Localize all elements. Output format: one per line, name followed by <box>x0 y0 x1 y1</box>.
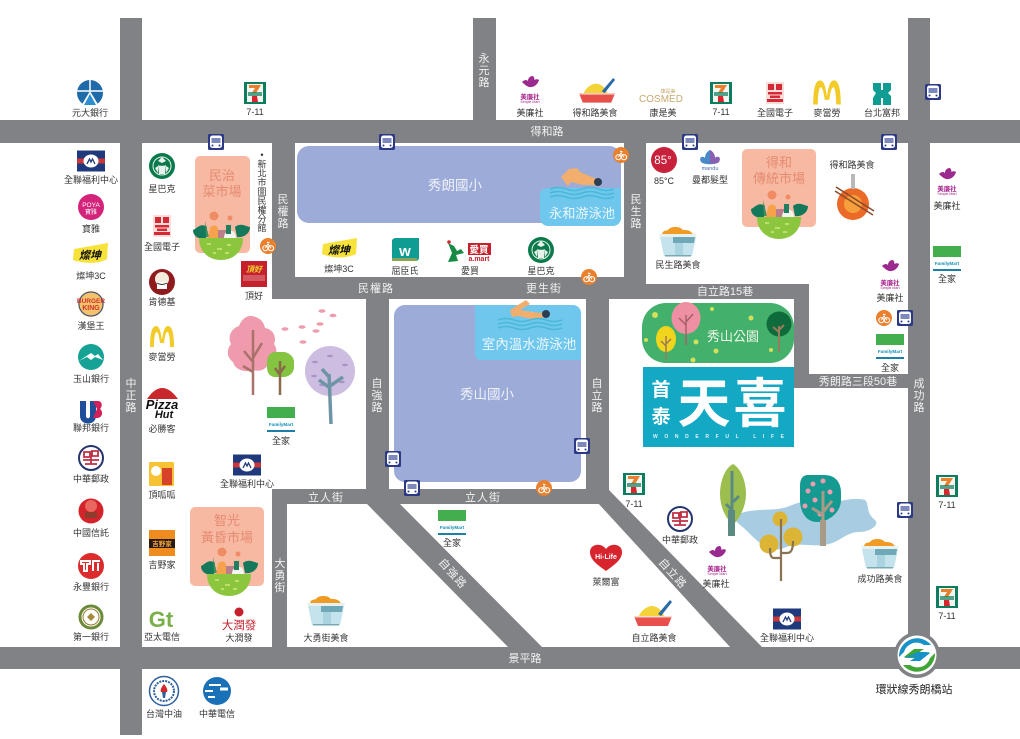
road name: 中正路: 中 <box>126 377 136 390</box>
store: 漢堡王 <box>77 291 105 331</box>
store: 全家 right: 全家 <box>938 273 956 284</box>
road name: 大勇街: 街 <box>274 580 286 594</box>
store: 7-11 right lower: 7-11 <box>938 611 956 621</box>
store: 中華郵政 left: 中華郵政 <box>73 473 109 484</box>
store: 全聯福利中心 left <box>64 150 118 185</box>
store: 康是美 <box>639 88 683 118</box>
road name: 自強路 diagonal: 自強路 <box>436 556 469 591</box>
panel: 秀山國小 <box>394 300 581 482</box>
illustration: pink, green and purple trees <box>228 309 355 424</box>
store: 美廉社 inner right: Simple Mart <box>880 286 900 290</box>
store: 得和路美食 right: 得和路美食 <box>829 159 875 170</box>
library label: 新北市圖民權分館: 新 <box>257 158 267 170</box>
road name: 永元路: 永 <box>478 51 490 65</box>
store: 美廉社 top: Simple Mart <box>520 100 540 104</box>
panel: 秀朗國小 <box>297 146 621 226</box>
store: 全家 bottom center: 全家 <box>443 537 461 548</box>
brand block: 首泰天喜: 喜 <box>734 375 786 434</box>
store: 燦坤3C center: 燦坤 <box>328 244 352 257</box>
store: 肯德基 <box>148 269 176 307</box>
store: 大勇街美食: 大勇街美食 <box>303 632 349 643</box>
store: 美廉社 right: 美廉社 <box>937 184 957 193</box>
store: 美廉社 top: 美廉社 <box>516 107 544 118</box>
store: 美廉社 right: 美廉社 <box>933 200 961 211</box>
library label: 新北市圖民權分館: 館 <box>257 222 267 233</box>
store: 美廉社 center <box>702 546 730 589</box>
store: 寶雅: 寶雅 <box>82 223 100 234</box>
store: 中華郵政 center: 中華郵政 <box>662 534 698 545</box>
store: 星巴克 center: 星巴克 <box>527 266 555 276</box>
store: 全家 inner right: FamilyMart <box>878 349 903 354</box>
library label: 新北市圖民權分館: 市 <box>257 177 267 188</box>
panel: 智光黃昏市場 <box>190 507 264 596</box>
panel: 秀山公園: 秀山公園 <box>707 329 759 344</box>
store: 美廉社 inner right <box>876 260 904 303</box>
store: 台灣中油: 台灣中油 <box>146 708 182 719</box>
store: 中華郵政 center <box>662 507 698 545</box>
road name: 立人街 left: 立人街 <box>308 490 344 504</box>
store: 全家 inner right: 全家 <box>881 362 899 373</box>
library label: 新北市圖民權分館: 圖 <box>257 187 267 197</box>
store: 永豐銀行: 永豐銀行 <box>73 581 109 592</box>
store: 聯邦銀行: 聯邦銀行 <box>73 422 109 433</box>
store: 中華電信: 中華電信 <box>199 708 235 719</box>
road name: 民生路: 路 <box>630 217 642 230</box>
road name: 自立路 diagonal: 自立路 <box>656 555 690 591</box>
store: 萊爾富: Hi-Life <box>595 554 617 561</box>
store: 麥當勞 top <box>813 80 841 118</box>
store: 7-11 center <box>623 473 645 509</box>
store: 7-11 top right <box>710 82 732 117</box>
store: 漢堡王: BURGER <box>77 298 105 305</box>
store: 漢堡王: 漢堡王 <box>77 320 105 331</box>
store: 星巴克 left: 星巴克 <box>148 184 176 194</box>
road name: 民權路 vertical: 權 <box>278 205 288 218</box>
road name: 自立路: 路 <box>592 401 602 414</box>
store: 玉山銀行: 玉山銀行 <box>73 373 109 384</box>
store: 元大銀行: 元大銀行 <box>72 107 108 118</box>
road name: 民權路 horizontal: 民權路 <box>358 282 394 295</box>
panel: 得和傳統市場: 得和 <box>766 155 792 170</box>
store: 自立路美食: 自立路美食 <box>631 632 677 643</box>
store: 美廉社 inner right: 美廉社 <box>876 292 904 303</box>
store: 亞太電信: Gt <box>149 607 174 632</box>
library label: 新北市圖民權分館: • <box>260 150 264 160</box>
road name: 景平路: 景平路 <box>508 652 542 665</box>
road name: 民生路: 生 <box>630 204 642 218</box>
store: 萊爾富 <box>590 545 622 587</box>
swimming pool: 室內溫水游泳池 <box>475 300 581 360</box>
road name: 成功路: 成 <box>914 377 924 390</box>
panel: 民治菜市場 <box>193 156 250 260</box>
brand block: 首泰天喜: WONDERFUL LIFE <box>653 434 785 440</box>
store: 得和路美食 right <box>829 159 875 220</box>
store: 中國信託: 中國信託 <box>73 527 109 538</box>
road name: 自立路15巷: 自立路15巷 <box>697 284 753 298</box>
store: 愛買: 愛買 <box>461 265 479 276</box>
store: 全聯福利中心 left: 全聯福利中心 <box>64 174 118 185</box>
station marker: 環狀線秀朗橋站: 環狀線秀朗橋站 <box>876 682 952 696</box>
store: 美廉社 top: 美廉社 <box>520 92 540 101</box>
store: 得和路美食 top: 得和路美食 <box>572 107 618 118</box>
store: 85°C: 85°C <box>654 176 675 186</box>
store: 必勝客: Pizza <box>146 397 178 412</box>
store: 美廉社 inner right: 美廉社 <box>880 278 900 287</box>
store: 大勇街美食 <box>303 596 349 643</box>
store: 7-11 center: 7-11 <box>625 499 643 509</box>
panel: 秀山國小: 秀山國小 <box>460 387 514 402</box>
store: 肯德基: 肯德基 <box>148 296 176 307</box>
store: 全聯福利中心 center: 全聯福利中心 <box>220 478 274 489</box>
store: 頂好: 頂好 <box>246 265 264 274</box>
store: 中華郵政 left <box>73 446 109 484</box>
store: 全聯福利中心 center <box>220 454 274 489</box>
store: 美廉社 right <box>933 168 961 211</box>
road name: 永元路: 路 <box>478 76 490 89</box>
panel: 民治菜市場: 民治 <box>209 168 235 183</box>
store: 寶雅: 寶雅 <box>85 208 97 216</box>
road name: 民生路: 民 <box>630 194 642 206</box>
store: 7-11 right lower <box>936 586 958 621</box>
store: 燦坤3C center: 燦坤3C <box>324 263 354 274</box>
brand block: 首泰天喜 <box>643 367 794 447</box>
road name: 民權路 vertical: 路 <box>278 217 288 230</box>
store: 頂好 <box>241 261 267 301</box>
store: 7-11 top right: 7-11 <box>712 107 730 117</box>
road name: 成功路: 功 <box>914 389 924 402</box>
panel: 得和傳統市場: 傳統市場 <box>753 171 805 186</box>
store: 全家 center-left: 全家 <box>272 435 290 446</box>
store: 麥當勞 left <box>148 326 176 362</box>
road name: 永元路: 元 <box>478 65 490 77</box>
library label: 新北市圖民權分館: 北 <box>257 169 267 179</box>
swimming pool: 永和游泳池 <box>540 168 621 226</box>
store: 萊爾富: 萊爾富 <box>592 576 620 587</box>
store: 全家 center-left: FamilyMart <box>269 422 294 427</box>
store: 全家 right: FamilyMart <box>935 261 960 266</box>
road name: 自立路: 立 <box>592 388 602 402</box>
store: 曼都髮型: mandu <box>702 166 718 172</box>
brand block: 首泰天喜: 天 <box>678 375 730 434</box>
store: 中國信託 <box>73 498 109 538</box>
store: 全聯福利中心 right <box>760 608 814 643</box>
store: 吉野家: 吉野家 <box>148 559 176 570</box>
store: 85°C: 85° <box>654 155 672 167</box>
road name: 民權路 vertical: 民 <box>278 194 288 206</box>
store: 屈臣氏: w <box>398 243 411 260</box>
panel: 得和傳統市場 <box>742 149 816 239</box>
swimming pool: 永和游泳池: 永和游泳池 <box>549 206 615 221</box>
store: 必勝客: 必勝客 <box>148 423 176 434</box>
store: 全國電子 left: 全國電子 <box>144 242 180 252</box>
panel: 智光黃昏市場: 智光 <box>214 513 240 528</box>
store: 必勝客: Hut <box>155 409 174 421</box>
station marker: 環狀線秀朗橋站 <box>876 632 952 696</box>
bus stop icons <box>208 84 941 518</box>
road name: 大勇街: 大 <box>274 556 286 570</box>
store: 屈臣氏: 屈臣氏 <box>391 266 419 276</box>
store: 美廉社 right: Simple Mart <box>937 192 957 196</box>
store: 康是美: COSMED <box>639 94 683 105</box>
store: 7-11 top <box>244 82 266 117</box>
store: 第一銀行 <box>73 606 109 642</box>
library label: 新北市圖民權分館: 分 <box>257 214 267 224</box>
store: 大潤發: 大潤發 <box>225 632 253 643</box>
road name: 中正路: 正 <box>126 390 136 402</box>
store: 7-11 top: 7-11 <box>246 107 264 117</box>
road name: 自強路: 路 <box>372 401 382 414</box>
store: 愛買: 愛買 <box>469 244 489 256</box>
store: 全家 bottom center: FamilyMart <box>440 525 465 530</box>
road name: 得和路: 得和路 <box>530 125 564 138</box>
store: 康是美: 康是美 <box>649 107 677 118</box>
store: 全家 center-left <box>267 407 295 446</box>
store: 寶雅: POYA <box>82 202 100 209</box>
store: 頂呱呱: 頂呱呱 <box>148 489 176 500</box>
store: 燦坤3C left: 燦坤 <box>79 249 103 262</box>
store: 自立路美食 <box>631 600 677 643</box>
store: 第一銀行: 第一銀行 <box>73 631 109 642</box>
store: 吉野家 <box>148 530 176 570</box>
road name: 秀朗路三段50巷: 秀朗路三段50巷 <box>819 374 897 388</box>
store: 玉山銀行 <box>73 344 109 384</box>
store: 曼都髮型 <box>692 150 728 185</box>
store: 大潤發: 大潤發 <box>222 618 257 632</box>
store: 星巴克 left <box>148 153 176 194</box>
library label: 新北市圖民權分館: 權 <box>257 204 267 215</box>
illustration: pond and trees <box>720 464 876 581</box>
store: 亞太電信 <box>144 607 180 642</box>
store: 美廉社 center: 美廉社 <box>707 564 727 573</box>
store: 寶雅 <box>78 194 104 234</box>
store: 星巴克 center <box>527 237 555 276</box>
store: 7-11 right upper: 7-11 <box>938 500 956 510</box>
store: 元大銀行 <box>72 80 108 118</box>
brand block: 首泰天喜: 泰 <box>651 405 671 428</box>
panel: 民治菜市場: 菜市場 <box>202 184 242 199</box>
brand block: 首泰天喜: 首 <box>651 378 671 401</box>
store: 愛買: a.mart <box>468 256 490 263</box>
store: 麥當勞 left: 麥當勞 <box>148 351 176 362</box>
store: 民生路美食: 民生路美食 <box>655 259 701 270</box>
store: 全家 bottom center <box>438 510 466 548</box>
store: 燦坤3C left <box>73 243 108 281</box>
store: 全國電子 top <box>757 82 793 118</box>
store: 台北富邦: 台北富邦 <box>864 107 900 118</box>
store: 民生路美食 <box>655 227 701 270</box>
store: 中華電信 <box>199 677 235 719</box>
store: 吉野家: 吉野家 <box>152 539 172 548</box>
bike station icons <box>260 147 892 496</box>
store: 全國電子 left <box>144 215 180 252</box>
panel: 秀山公園 <box>642 302 794 363</box>
store: 得和路美食 top <box>572 78 618 118</box>
store: 成功路美食: 成功路美食 <box>857 573 903 584</box>
store: 大潤發 <box>222 608 257 643</box>
store: 亞太電信: 亞太電信 <box>144 631 180 642</box>
store: 曼都髮型: 曼都髮型 <box>692 174 728 185</box>
store: 成功路美食 <box>857 539 903 584</box>
panel: 智光黃昏市場: 黃昏市場 <box>201 530 253 545</box>
road name: 成功路: 路 <box>914 401 924 414</box>
store: 7-11 right upper <box>936 475 958 510</box>
store: 頂呱呱 <box>148 462 176 500</box>
store: 美廉社 center: 美廉社 <box>702 578 730 589</box>
store: 燦坤3C center <box>322 238 357 274</box>
store: 麥當勞 top: 麥當勞 <box>813 107 841 118</box>
store: 燦坤3C left: 燦坤3C <box>76 270 106 281</box>
road name: 立人街 middle: 立人街 <box>465 490 501 504</box>
store: 全聯福利中心 right: 全聯福利中心 <box>760 632 814 643</box>
store: 85°C <box>651 147 677 186</box>
road name: 自強路: 強 <box>372 389 382 402</box>
store: 台灣中油 <box>146 676 182 719</box>
road name: 自強路: 自 <box>372 377 382 390</box>
swimming pool: 室內溫水游泳池: 室內溫水游泳池 <box>482 336 577 352</box>
store: 屈臣氏 <box>391 238 419 276</box>
store: 全國電子 top: 全國電子 <box>757 108 793 118</box>
store: 美廉社 top <box>516 76 544 118</box>
road name: 自立路: 自 <box>592 377 602 390</box>
library label: 新北市圖民權分館: 民 <box>257 196 267 206</box>
store: 必勝客 <box>146 388 178 434</box>
store: 漢堡王: KING <box>82 305 100 312</box>
store: 台北富邦 <box>864 83 900 118</box>
road name: 中正路: 路 <box>126 401 136 414</box>
store: 全家 inner right <box>876 334 904 373</box>
store: 美廉社 center: Simple Mart <box>707 572 727 576</box>
store: 頂好: 頂好 <box>245 290 263 301</box>
store: 康是美: 康是美 <box>660 88 676 95</box>
store: 永豐銀行 <box>73 553 109 592</box>
store: 聯邦銀行 <box>73 401 109 433</box>
store: 愛買 <box>447 240 491 276</box>
road name: 更生街: 更生街 <box>526 281 562 295</box>
road name: 大勇街: 勇 <box>274 569 286 582</box>
store: 全家 right <box>933 246 961 284</box>
panel: 秀朗國小: 秀朗國小 <box>428 178 482 193</box>
